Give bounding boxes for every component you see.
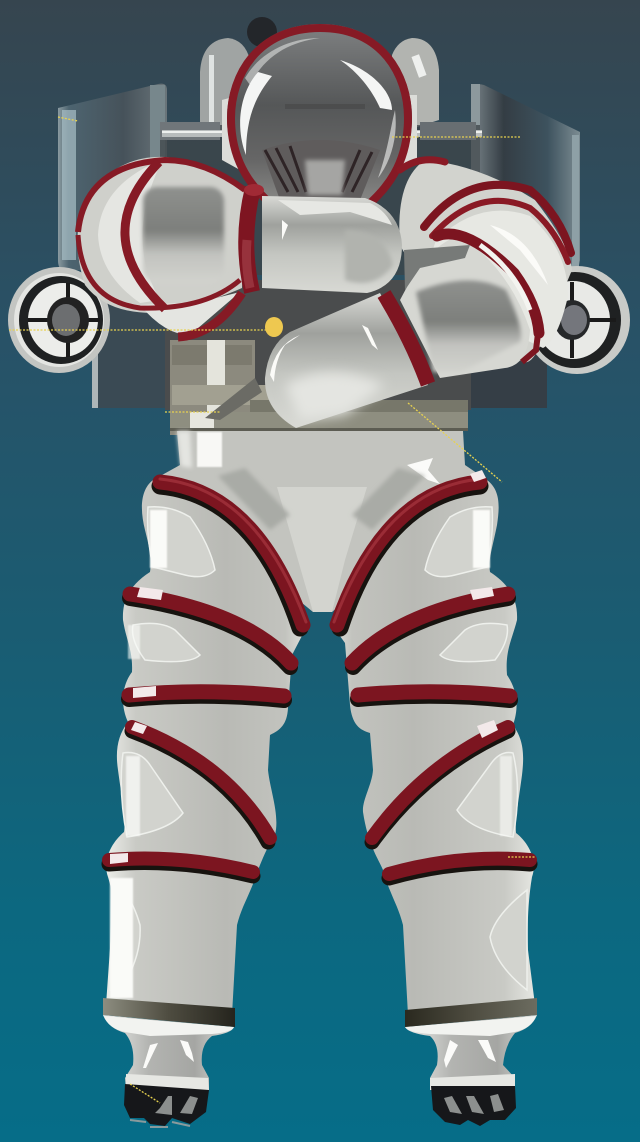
left leg: [106, 479, 306, 1015]
right boot: [405, 1015, 537, 1090]
helmet reflections: [240, 38, 396, 178]
left leg red bands: [109, 479, 306, 876]
right leg highlights: [473, 510, 512, 836]
right thruster ring: [524, 266, 630, 374]
right leg red bands: [334, 479, 530, 878]
left boot: [103, 1015, 234, 1090]
left leg recess panels: [110, 507, 215, 992]
right ankle band: [405, 998, 537, 1027]
left upper arm: [78, 157, 245, 337]
rear cylinders behind helmet: [200, 17, 439, 135]
left glass tank panel: [58, 84, 167, 270]
right forearm (lower, crossing): [265, 293, 428, 428]
shoulder shells behind helmet: [222, 95, 417, 170]
left leg body: [106, 480, 305, 1015]
right leg body: [332, 480, 535, 1015]
left leg highlights: [110, 510, 167, 998]
left forearm cuff: [246, 188, 253, 292]
horizontal rod: [160, 122, 482, 140]
left foot claws: [124, 1084, 209, 1127]
left ankle band: [103, 998, 235, 1027]
left thruster ring: [8, 267, 110, 373]
central waist column: [170, 340, 468, 435]
right leg: [332, 470, 535, 1015]
helmet: [222, 24, 417, 205]
right foot claws: [431, 1086, 516, 1126]
yellow marker dot: [265, 317, 283, 337]
dark backpack frame: [92, 125, 547, 410]
torso highlights and shading: [177, 431, 440, 612]
right arm shoulder bands: [400, 160, 571, 262]
hand mechanism: [205, 245, 470, 420]
left forearm (upper, crossing): [244, 184, 402, 293]
right glass tank panel: [471, 84, 580, 274]
right elbow shell: [420, 211, 568, 348]
helmet glass dome: [227, 24, 412, 205]
right leg band reflections: [470, 470, 498, 738]
left leg band reflections: [110, 587, 163, 864]
yellow dotted leader lines: [9, 117, 536, 1103]
right forearm cuff: [384, 294, 428, 384]
left arm lower shell: [140, 292, 240, 335]
right leg recess panels: [425, 507, 527, 990]
waist band: [170, 412, 468, 431]
torso: [153, 431, 487, 612]
right upper arm and elbow: [399, 160, 572, 378]
left arm red bands: [78, 160, 245, 337]
helmet interior detail: [262, 104, 380, 200]
helmet red ring: [231, 28, 408, 205]
